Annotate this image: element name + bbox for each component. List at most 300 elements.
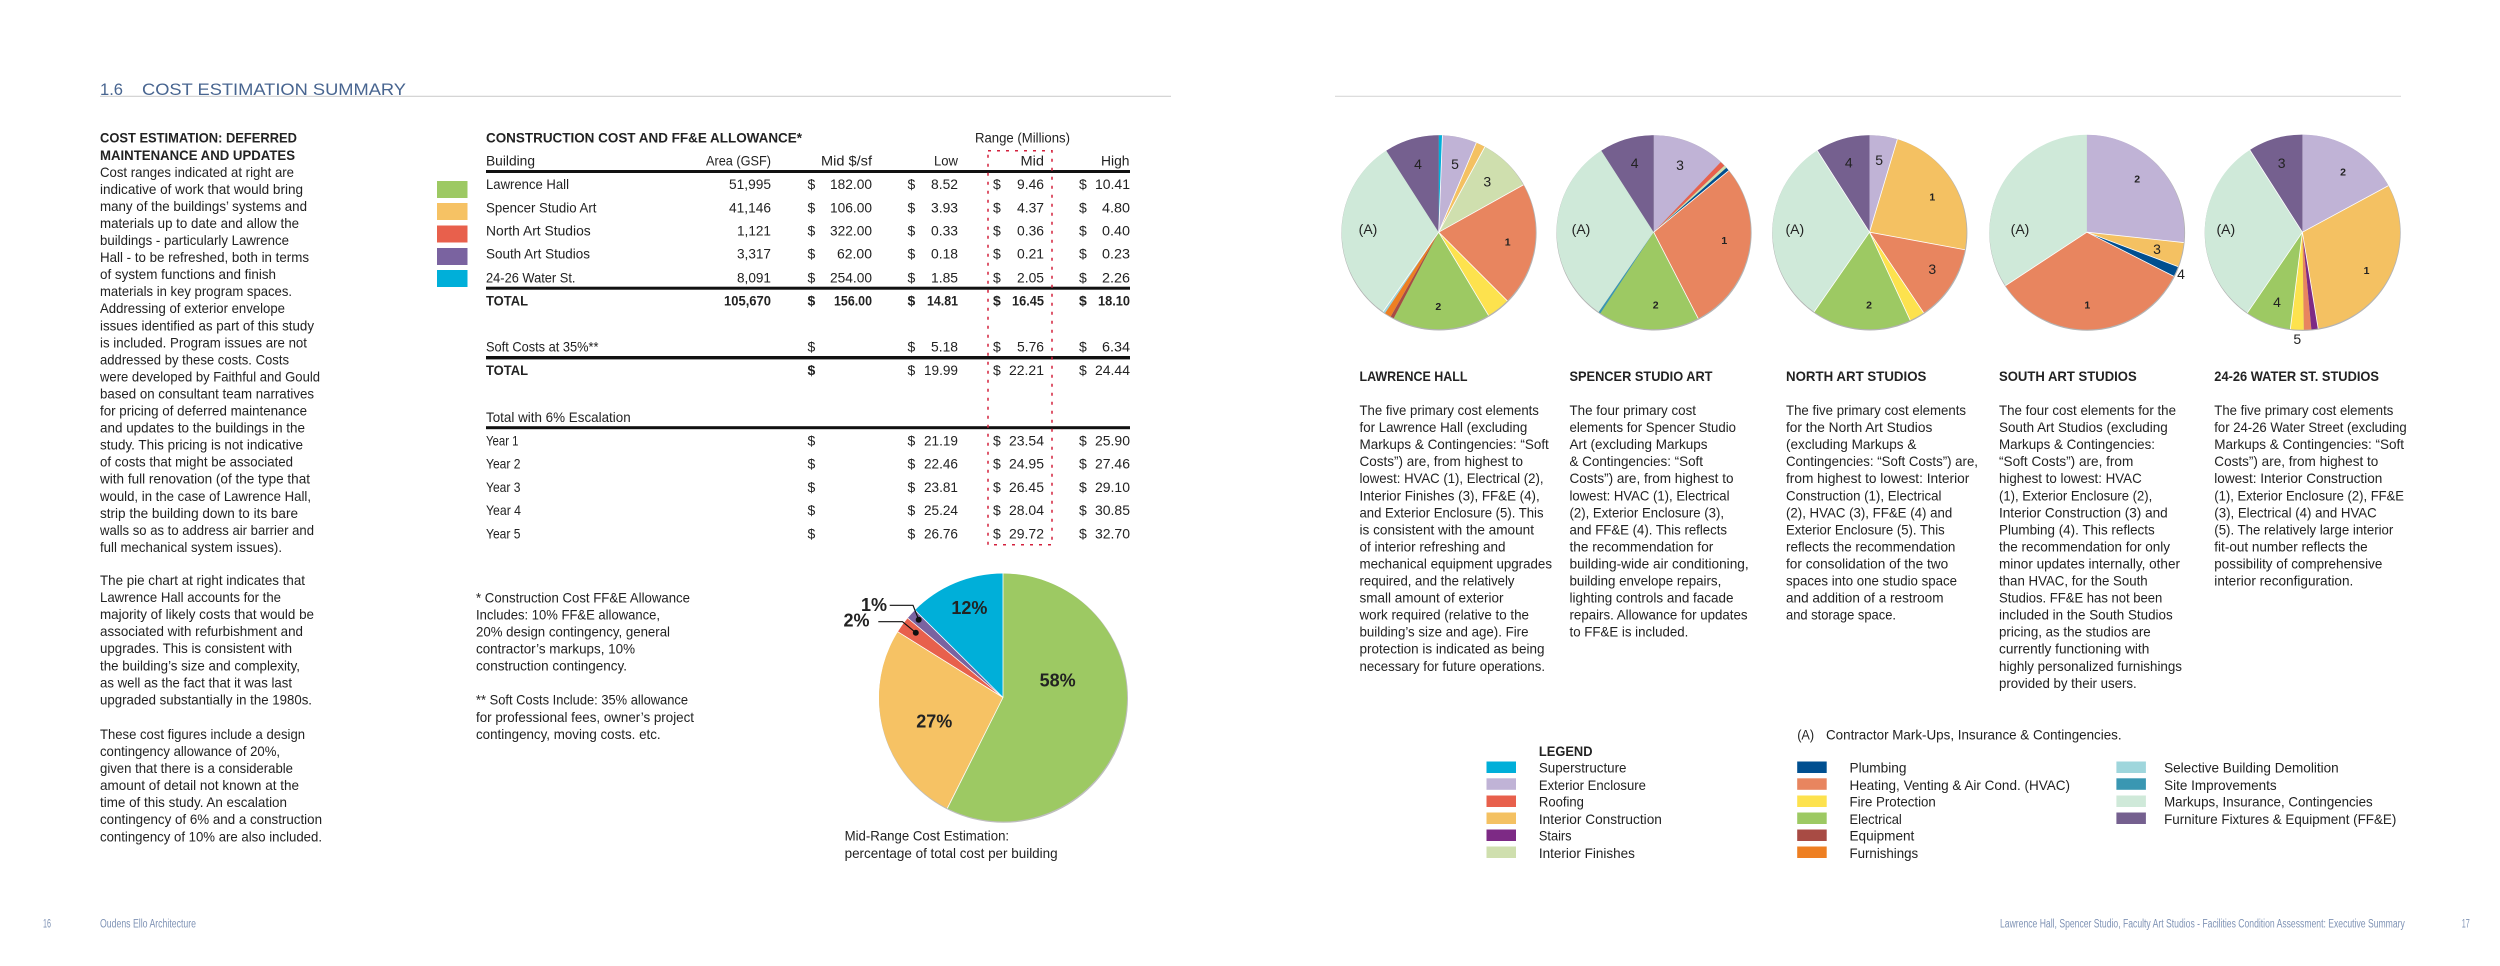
pie labels: 2: [1435, 301, 1441, 313]
text block: cost ranges: based on consultant team narratives: [100, 386, 314, 402]
row: South Art Studios: 3,317: [737, 246, 771, 262]
row: year 5: 32.70: [1095, 525, 1130, 541]
text block: cost ranges: Hall - to be refreshed, both in terms: [100, 249, 309, 265]
text block: pie chart commentary: as well as the fact that it was last: [100, 674, 292, 690]
body: currently functioning with: [1999, 641, 2149, 657]
body: for consolidation of the two: [1786, 556, 1948, 572]
row: year 3: $: [993, 479, 1001, 495]
body: building-wide air conditioning,: [1570, 556, 1749, 572]
text block: pie chart commentary: upgrades. This is consistent with: [100, 640, 292, 656]
footnotes: 20% design contingency, general: [476, 624, 670, 640]
body: the recommendation for: [1570, 538, 1714, 554]
legend column 3: Site Improvements: [2164, 777, 2277, 793]
heading: deferred maintenance: [100, 130, 297, 163]
panel: construction cost table: [437, 130, 1130, 545]
legend column 3: Markups, Insurance, Contingencies: [2164, 794, 2373, 810]
row: year 1: $: [1079, 432, 1087, 448]
row: year 2: $: [1079, 456, 1087, 472]
row: year 5: $: [1079, 525, 1087, 541]
row: Lawrence Hall: 8.52: [931, 176, 958, 192]
body: possibility of comprehensive: [2214, 556, 2382, 572]
legend column 3: Selective Building Demolition: [2164, 760, 2339, 776]
pie labels: 2: [1653, 299, 1659, 311]
row: total: TOTAL: [486, 292, 528, 308]
percentage labels: 1%: [861, 595, 887, 615]
row: total: $: [1079, 292, 1087, 308]
row: 24-26 Water St.: $: [808, 269, 816, 285]
text block: contingency: amount of detail not known at the: [100, 777, 299, 793]
row: South Art Studios: [486, 246, 1130, 262]
legend column 2: Electrical: [1850, 811, 1902, 827]
row: soft costs: 6.34: [1102, 339, 1130, 355]
body: small amount of exterior: [1360, 590, 1504, 606]
text block: cost ranges: Addressing of exterior envelope: [100, 300, 285, 316]
text block: cost ranges: full mechanical system issues).: [100, 539, 282, 555]
body: interior reconfiguration.: [2214, 572, 2353, 588]
row: total: $: [993, 292, 1001, 308]
pie labels: (A): [1785, 221, 1804, 237]
footer: left page: [43, 919, 196, 931]
legend column 1: Stairs: [1539, 828, 1572, 844]
pie labels: 1: [2084, 299, 2090, 311]
legend column 2: Furnishings: [1850, 845, 1918, 861]
row: year 3: $: [908, 479, 916, 495]
pie labels: 3: [1483, 174, 1491, 190]
row: 24-26 Water St.: $: [1079, 269, 1087, 285]
percentage labels: 2%: [843, 610, 870, 630]
row: year 3: Year 3: [486, 479, 521, 495]
text block: pie chart commentary: [100, 572, 314, 707]
legend column 3: Furniture Fixtures & Equipment (FF&E): [2164, 811, 2396, 827]
body: spaces into one studio space: [1786, 572, 1957, 588]
text block: cost ranges: study. This pricing is not indicative: [100, 437, 303, 453]
text block: pie chart commentary: associated with refurbishment and: [100, 623, 303, 639]
pie labels: 4: [1631, 155, 1639, 171]
text block: cost ranges: addressed by these costs. Costs: [100, 351, 289, 367]
legend column 1: Exterior Enclosure: [1539, 777, 1646, 793]
text block: cost ranges: is included. Program issues are not: [100, 334, 307, 350]
leader lines: [878, 605, 921, 635]
text block: contingency: contingency of 10% are also included.: [100, 828, 322, 844]
legend column 3: [2116, 760, 2396, 827]
pie labels: 4: [1414, 156, 1422, 172]
body: Construction (1), Electrical: [1786, 487, 1942, 503]
row: Lawrence Hall: 51,995: [729, 176, 771, 192]
table heading: CONSTRUCTION COST AND FF&E ALLOWANCE*: [486, 130, 803, 146]
text block: contingency: contingency allowance of 20%,: [100, 743, 280, 759]
text block: pie chart commentary: upgraded substantially in the 1980s.: [100, 691, 312, 707]
text block: pie chart commentary: The pie chart at right indicates that: [100, 572, 305, 588]
row: 24-26 Water St.: 1.85: [931, 269, 958, 285]
row: 24-26 Water St.: [486, 269, 1130, 285]
body: is consistent with the amount: [1360, 521, 1534, 537]
row: year 4: $: [1079, 502, 1087, 518]
footnotes: Includes: 10% FF&E allowance,: [476, 606, 660, 622]
row: total: $: [808, 292, 816, 308]
pie labels: [1572, 155, 1727, 311]
body: South Art Studios (excluding: [1999, 419, 2168, 435]
pie labels: 1: [2364, 265, 2370, 277]
pie: 24-26 Water St. Studios: [2205, 135, 2401, 347]
footer: right page: 17: [2462, 919, 2470, 931]
percentage labels: 58%: [1040, 670, 1076, 690]
body: [1570, 402, 1749, 640]
body: and storage space.: [1786, 607, 1896, 623]
row: year 3: [486, 479, 1130, 495]
table header row: Mid $/sf: [821, 153, 872, 169]
pie labels: (A): [1359, 221, 1377, 237]
body: The four primary cost: [1570, 402, 1696, 418]
text block: cost ranges: were developed by Faithful and Gould: [99, 368, 320, 384]
row: South Art Studios: 0.18: [931, 246, 958, 262]
row: North Art Studios: $: [908, 222, 916, 238]
legend column 2: Equipment: [1850, 828, 1914, 844]
body: Costs”) are, from highest to: [1570, 470, 1734, 486]
row: Spencer Studio Art: 41,146: [729, 199, 771, 215]
row: year 5: Year 5: [486, 525, 521, 541]
body: Exterior Enclosure (5). This: [1786, 521, 1945, 537]
row: year 4: $: [993, 502, 1001, 518]
legend column 2: Heating, Venting & Air Cond. (HVAC): [1850, 777, 2070, 793]
heading: LAWRENCE HALL: [1360, 368, 1468, 384]
body: Markups & Contingencies: “Soft: [1360, 436, 1549, 452]
body: lowest: HVAC (1), Electrical (2),: [1360, 470, 1544, 486]
pie chart: mid-range cost per building: [843, 574, 1128, 823]
text block: pie chart commentary: majority of likely costs that would be: [100, 606, 314, 622]
row: Lawrence Hall: 10.41: [1095, 176, 1130, 192]
body: Studios. FF&E has not been: [1999, 590, 2162, 606]
row: year 4: $: [808, 502, 816, 518]
legend column 1: Interior Construction: [1539, 811, 1662, 827]
body: required, and the relatively: [1360, 572, 1514, 588]
row: year 4: Year 4: [486, 502, 521, 518]
pie labels: 1: [1929, 192, 1935, 204]
text block: cost ranges: issues identified as part of this study: [100, 317, 314, 333]
heading: SPENCER STUDIO ART: [1570, 368, 1713, 384]
text block: cost ranges: materials up to date and allow the: [100, 215, 299, 231]
text block: contingency: time of this study. An escalation: [100, 794, 287, 810]
panel: Lawrence Hall text: [1359, 368, 1552, 674]
body: and FF&E (4). This reflects: [1570, 521, 1727, 537]
table header row: Building: [486, 153, 535, 169]
legend column 2: Plumbing: [1850, 760, 1906, 776]
body: (excluding Markups &: [1786, 436, 1917, 452]
text block: contingency: given that there is a considerable: [100, 760, 293, 776]
row: year 2: $: [908, 456, 916, 472]
row: year 1: 23.54: [1009, 432, 1044, 448]
row: soft costs: $: [808, 339, 816, 355]
row: year 3: 26.45: [1009, 479, 1044, 495]
row: total with soft costs: 19.99: [924, 362, 958, 378]
row: South Art Studios: 62.00: [837, 246, 872, 262]
panel: South Art Studios text: [1999, 368, 2182, 691]
row: year 4: 30.85: [1095, 502, 1130, 518]
row: total: 105,670: [724, 292, 771, 308]
row: year 1: $: [993, 432, 1001, 448]
body: The five primary cost elements: [1786, 402, 1966, 418]
row: year 5: 26.76: [924, 525, 958, 541]
pie labels: 5: [2293, 331, 2301, 347]
range label: Range (Millions): [975, 130, 1070, 146]
row: soft costs: [486, 339, 1130, 355]
pie labels: 3: [2278, 155, 2286, 171]
row: year 5: $: [908, 525, 916, 541]
table header row: Low: [934, 153, 959, 169]
row: 24-26 Water St.: 254.00: [830, 269, 872, 285]
panel: left narrative text: [99, 130, 322, 844]
panel: 24-26 Water St. Studios text: [2214, 368, 2407, 588]
pie labels: [1785, 152, 1936, 311]
row: Lawrence Hall: $: [808, 176, 816, 192]
row: Lawrence Hall: Lawrence Hall: [486, 176, 569, 192]
row: total with soft costs: $: [1079, 362, 1087, 378]
pie labels: 2: [1866, 299, 1872, 311]
pie labels: (A): [2011, 221, 2029, 237]
row: South Art Studios: $: [993, 246, 1001, 262]
text block: contingency: contingency of 6% and a construction: [100, 811, 322, 827]
body: (3), Electrical (4) and HVAC: [2214, 504, 2377, 520]
pie: North Art Studios: [1772, 135, 1967, 330]
pie labels: 2: [2134, 174, 2140, 186]
body: reflects the recommendation: [1786, 538, 1955, 554]
text block: cost ranges: of costs that might be associated: [100, 454, 293, 470]
pie labels: 1: [1721, 235, 1727, 247]
row: North Art Studios: 322.00: [830, 222, 872, 238]
row: South Art Studios: $: [908, 246, 916, 262]
row: year 5: [486, 525, 1130, 541]
body: lowest: HVAC (1), Electrical: [1570, 487, 1730, 503]
body: highest to lowest: HVAC: [1999, 470, 2142, 486]
legend column 1: Interior Finishes: [1539, 845, 1635, 861]
row: total with soft costs: $: [808, 362, 816, 378]
row: South Art Studios: 0.23: [1102, 246, 1130, 262]
row: year 3: $: [1079, 479, 1087, 495]
row: total: 14.81: [927, 292, 958, 308]
legend column 2: [1797, 760, 2070, 861]
text block: cost ranges: [99, 164, 320, 555]
body: and addition of a restroom: [1786, 590, 1944, 606]
text block: cost ranges: would, in the case of Lawrence Hall,: [99, 488, 311, 504]
row: total with soft costs: 22.21: [1009, 362, 1044, 378]
building colour swatches: [437, 181, 468, 287]
row: total with soft costs: [486, 362, 1130, 378]
body: building envelope repairs,: [1570, 572, 1721, 588]
text block: cost ranges: materials in key program spaces.: [100, 283, 292, 299]
body: provided by their users.: [1999, 675, 2137, 691]
text block: cost ranges: buildings - particularly Lawrence: [100, 232, 289, 248]
row: soft costs: 5.76: [1017, 339, 1044, 355]
pie labels: [2011, 174, 2185, 311]
body: (2), HVAC (3), FF&E (4) and: [1786, 504, 1952, 520]
row: year 1: 21.19: [924, 432, 958, 448]
body: [1999, 402, 2182, 691]
row: 24-26 Water St.: 2.05: [1017, 269, 1044, 285]
text block: contingency: These cost figures include a design: [100, 726, 305, 742]
body: Plumbing (4). This reflects: [1999, 521, 2155, 537]
row: 24-26 Water St.: 24-26 Water St.: [486, 269, 576, 285]
row: year 4: $: [908, 502, 916, 518]
row: year 1: Year 1: [486, 432, 519, 448]
table header row: Area (GSF): [706, 153, 771, 169]
body: [2214, 402, 2407, 588]
title: COST ESTIMATION SUMMARY: [142, 80, 406, 99]
body: lighting controls and facade: [1570, 590, 1734, 606]
body: (2), Exterior Enclosure (3),: [1570, 504, 1724, 520]
row: total: 18.10: [1098, 292, 1130, 308]
pie labels: [2216, 155, 2370, 347]
heading: deferred maintenance: COST ESTIMATION: DEFERRED: [100, 130, 297, 146]
body: for 24-26 Water Street (excluding: [2214, 419, 2407, 435]
footnotes: for professional fees, owner’s project: [476, 709, 694, 725]
pie caption: percentage of total cost per building: [845, 845, 1058, 861]
row: year 4: 25.24: [924, 502, 958, 518]
row: year 1: $: [908, 432, 916, 448]
body: Costs”) are, from highest to: [2214, 453, 2378, 469]
body: pricing, as the studios are: [1999, 624, 2151, 640]
pie labels: 3: [2153, 241, 2161, 257]
legend column 1: Roofing: [1539, 794, 1584, 810]
row: North Art Studios: 0.33: [931, 222, 958, 238]
footnotes: construction contingency.: [476, 658, 627, 674]
text block: pie chart commentary: Lawrence Hall accounts for the: [100, 589, 281, 605]
pie labels: 4: [2177, 266, 2185, 282]
text block: pie chart commentary: the building’s size and complexity,: [100, 657, 300, 673]
panel: North Art Studios text: [1786, 368, 1978, 623]
table header row: [486, 153, 1130, 169]
row: total with soft costs: 24.44: [1095, 362, 1130, 378]
body: for the North Art Studios: [1786, 419, 1932, 435]
row: total with soft costs: $: [908, 362, 916, 378]
contractor mark-ups note: Contractor Mark-Ups, Insurance & Contingencies.: [1826, 726, 2122, 742]
body: Markups & Contingencies: “Soft: [2214, 436, 2404, 452]
body: from highest to lowest: Interior: [1786, 470, 1970, 486]
row: North Art Studios: $: [1079, 222, 1087, 238]
row: total with soft costs: $: [993, 362, 1001, 378]
row: total: 156.00: [834, 292, 872, 308]
row: year 5: $: [993, 525, 1001, 541]
text block: cost ranges: walls so as to address air barrier and: [99, 522, 314, 538]
pie labels: [1359, 156, 1511, 313]
body: Markups & Contingencies:: [1999, 436, 2155, 452]
percentage labels: [843, 595, 1076, 732]
contractor mark-ups note: (A): [1797, 726, 1814, 742]
row: total: 16.45: [1012, 292, 1044, 308]
pie: Spencer Studio Art: [1556, 135, 1752, 330]
row: year 2: $: [993, 456, 1001, 472]
body: to FF&E is included.: [1570, 624, 1688, 640]
row: total: $: [908, 292, 916, 308]
panel: Spencer Studio Art text: [1570, 368, 1749, 640]
pie: Lawrence Hall: [1341, 135, 1537, 330]
row: 24-26 Water St.: 2.26: [1102, 269, 1130, 285]
row: North Art Studios: North Art Studios: [486, 222, 591, 238]
pie: South Art Studios: [1989, 135, 2185, 331]
row: Spencer Studio Art: $: [908, 199, 916, 215]
row: soft costs: $: [908, 339, 916, 355]
row: North Art Studios: 1,121: [737, 222, 771, 238]
body: “Soft Costs”) are, from: [1999, 453, 2133, 469]
row: North Art Studios: 0.40: [1102, 222, 1130, 238]
row: 24-26 Water St.: 8,091: [737, 269, 771, 285]
row: Lawrence Hall: $: [993, 176, 1001, 192]
row: year 2: 22.46: [924, 456, 958, 472]
body: for Lawrence Hall (excluding: [1360, 419, 1527, 435]
pie labels: (A): [1572, 221, 1590, 237]
body: included in the South Studios: [1999, 607, 2173, 623]
row: year 1: [486, 432, 1130, 448]
heading: deferred maintenance: MAINTENANCE AND UPDATES: [100, 147, 295, 163]
footnotes: [476, 589, 694, 742]
escalation heading: Total with 6% Escalation: [486, 409, 631, 425]
body: repairs. Allowance for updates: [1570, 607, 1748, 623]
text block: cost ranges: indicative of work that would bring: [100, 181, 303, 197]
text block: cost ranges: many of the buildings’ systems and: [100, 198, 307, 214]
row: Spencer Studio Art: $: [1079, 199, 1087, 215]
body: Contingencies: “Soft Costs”) are,: [1786, 453, 1978, 469]
body: [1786, 402, 1978, 623]
text block: cost ranges: with full renovation (of the type that: [99, 471, 310, 487]
mid-range dashed highlight: [988, 151, 1052, 545]
text block: contingency: [100, 726, 322, 844]
row: Spencer Studio Art: 4.37: [1017, 199, 1044, 215]
body: than HVAC, for the South: [1999, 572, 2148, 588]
row: Lawrence Hall: 182.00: [830, 176, 872, 192]
legend column 1: [1486, 760, 1662, 861]
row: year 1: $: [808, 432, 816, 448]
row: year 5: $: [808, 525, 816, 541]
body: work required (relative to the: [1359, 607, 1529, 623]
body: of interior refreshing and: [1360, 538, 1506, 554]
pie labels: 4: [1845, 154, 1853, 170]
text block: cost ranges: of system functions and finish: [100, 266, 276, 282]
row: Spencer Studio Art: $: [993, 199, 1001, 215]
row: South Art Studios: $: [1079, 246, 1087, 262]
pie labels: 5: [1451, 156, 1459, 172]
row: year 3: 29.10: [1095, 479, 1130, 495]
text block: cost ranges: and updates to the buildings in the: [100, 420, 305, 436]
row: Spencer Studio Art: Spencer Studio Art: [486, 199, 597, 215]
row: Lawrence Hall: $: [1079, 176, 1087, 192]
body: Art (excluding Markups: [1570, 436, 1708, 452]
text block: cost ranges: for pricing of deferred maintenance: [100, 402, 307, 418]
body: fit-out number reflects the: [2214, 538, 2368, 554]
row: North Art Studios: $: [993, 222, 1001, 238]
body: Interior Construction (3) and: [1999, 504, 2168, 520]
body: Costs”) are, from highest to: [1360, 453, 1523, 469]
pie caption: Mid-Range Cost Estimation:: [845, 828, 1009, 844]
pie labels: 3: [1676, 157, 1684, 173]
body: Interior Finishes (3), FF&E (4),: [1360, 487, 1540, 503]
row: soft costs: $: [1079, 339, 1087, 355]
row: year 4: 28.04: [1009, 502, 1044, 518]
row: South Art Studios: 0.21: [1017, 246, 1044, 262]
row: total: [486, 292, 1130, 308]
footnotes: contingency, moving costs. etc.: [476, 726, 661, 742]
row: Lawrence Hall: [486, 176, 1130, 192]
row: Spencer Studio Art: 4.80: [1102, 199, 1130, 215]
row: total with soft costs: TOTAL: [486, 362, 528, 378]
pie labels: 3: [1928, 261, 1936, 277]
body: The four cost elements for the: [1999, 402, 2176, 418]
body: (1), Exterior Enclosure (2), FF&E: [2214, 487, 2404, 503]
row: Spencer Studio Art: [486, 199, 1130, 215]
body: the recommendation for only: [1999, 538, 2170, 554]
row: year 2: 27.46: [1095, 456, 1130, 472]
body: protection is indicated as being: [1360, 641, 1544, 657]
row: South Art Studios: $: [808, 246, 816, 262]
row: 24-26 Water St.: $: [993, 269, 1001, 285]
table header row: Mid: [1020, 153, 1044, 169]
